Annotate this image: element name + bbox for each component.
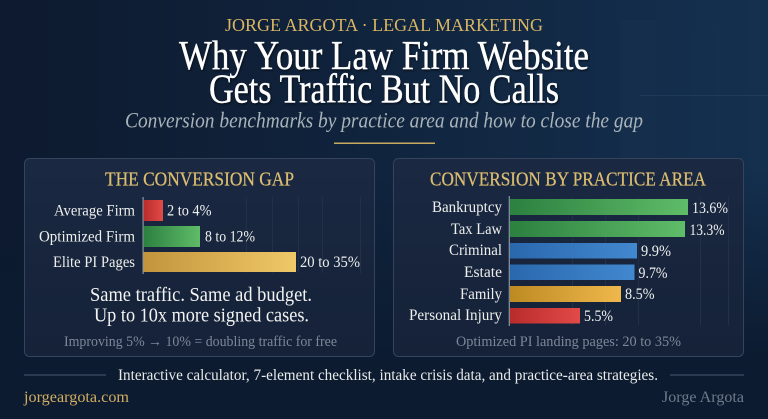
bar chart: practice areas: 9.9% xyxy=(641,243,671,260)
bar chart: conversion gap: 2 to 4% xyxy=(167,202,212,220)
bar chart: practice areas: Family xyxy=(460,286,502,303)
panel: the conversion gap xyxy=(24,158,374,356)
footnote: Improving 5% → 10% = doubling traffic for free xyxy=(64,334,337,350)
bar chart: conversion gap: 8 to 12% xyxy=(205,228,255,246)
bar chart: practice areas: Personal Injury xyxy=(409,307,502,324)
bar chart: conversion gap: Optimized Firm xyxy=(39,228,136,246)
bar chart: practice areas: 8.5% xyxy=(625,286,654,303)
bar chart: conversion gap: Elite PI Pages xyxy=(53,254,135,271)
gold divider xyxy=(334,142,435,144)
title: Why Your Law Firm Website xyxy=(179,32,589,78)
brand eyebrow: JORGE ARGOTA · LEGAL MARKETING xyxy=(225,15,543,35)
bar chart: conversion gap: Average Firm xyxy=(54,202,136,220)
bar chart: practice areas: Estate xyxy=(464,264,502,281)
footer strip text with rules: Interactive calculator, 7-element checklist, intake crisis data, and practice-area strategies. xyxy=(118,367,658,384)
bar chart: practice areas xyxy=(409,196,729,326)
heading: the conversion gap: THE CONVERSION GAP xyxy=(105,170,294,190)
takeaway text: Same traffic. Same ad budget. xyxy=(90,284,312,306)
takeaway text xyxy=(90,284,312,326)
bar chart: practice areas: Criminal xyxy=(449,242,503,259)
bar chart: conversion gap: 20 to 35% xyxy=(300,254,360,271)
bar chart: practice areas: 5.5% xyxy=(584,308,613,325)
bar chart: practice areas: 13.6% xyxy=(692,200,728,217)
footnote: Optimized PI landing pages: 20 to 35% xyxy=(456,334,681,350)
bar chart: practice areas: 9.7% xyxy=(638,265,668,282)
bar chart: conversion gap xyxy=(39,197,361,274)
bar chart: practice areas: Tax Law xyxy=(451,221,502,238)
title: Gets Traffic But No Calls xyxy=(209,66,559,112)
panel: conversion by practice area xyxy=(394,158,744,356)
footer author: Jorge Argota xyxy=(662,389,744,406)
heading: conversion by practice area: CONVERSION BY PRACTICE AREA xyxy=(430,170,706,190)
title xyxy=(179,32,589,112)
bar chart: practice areas: 13.3% xyxy=(690,222,724,239)
takeaway text: Up to 10x more signed cases. xyxy=(94,304,309,326)
footer link: jorgeargota.com xyxy=(23,389,130,406)
subtitle: Conversion benchmarks by practice area and how to close the gap xyxy=(125,108,643,132)
bar chart: practice areas: Bankruptcy xyxy=(432,199,502,216)
